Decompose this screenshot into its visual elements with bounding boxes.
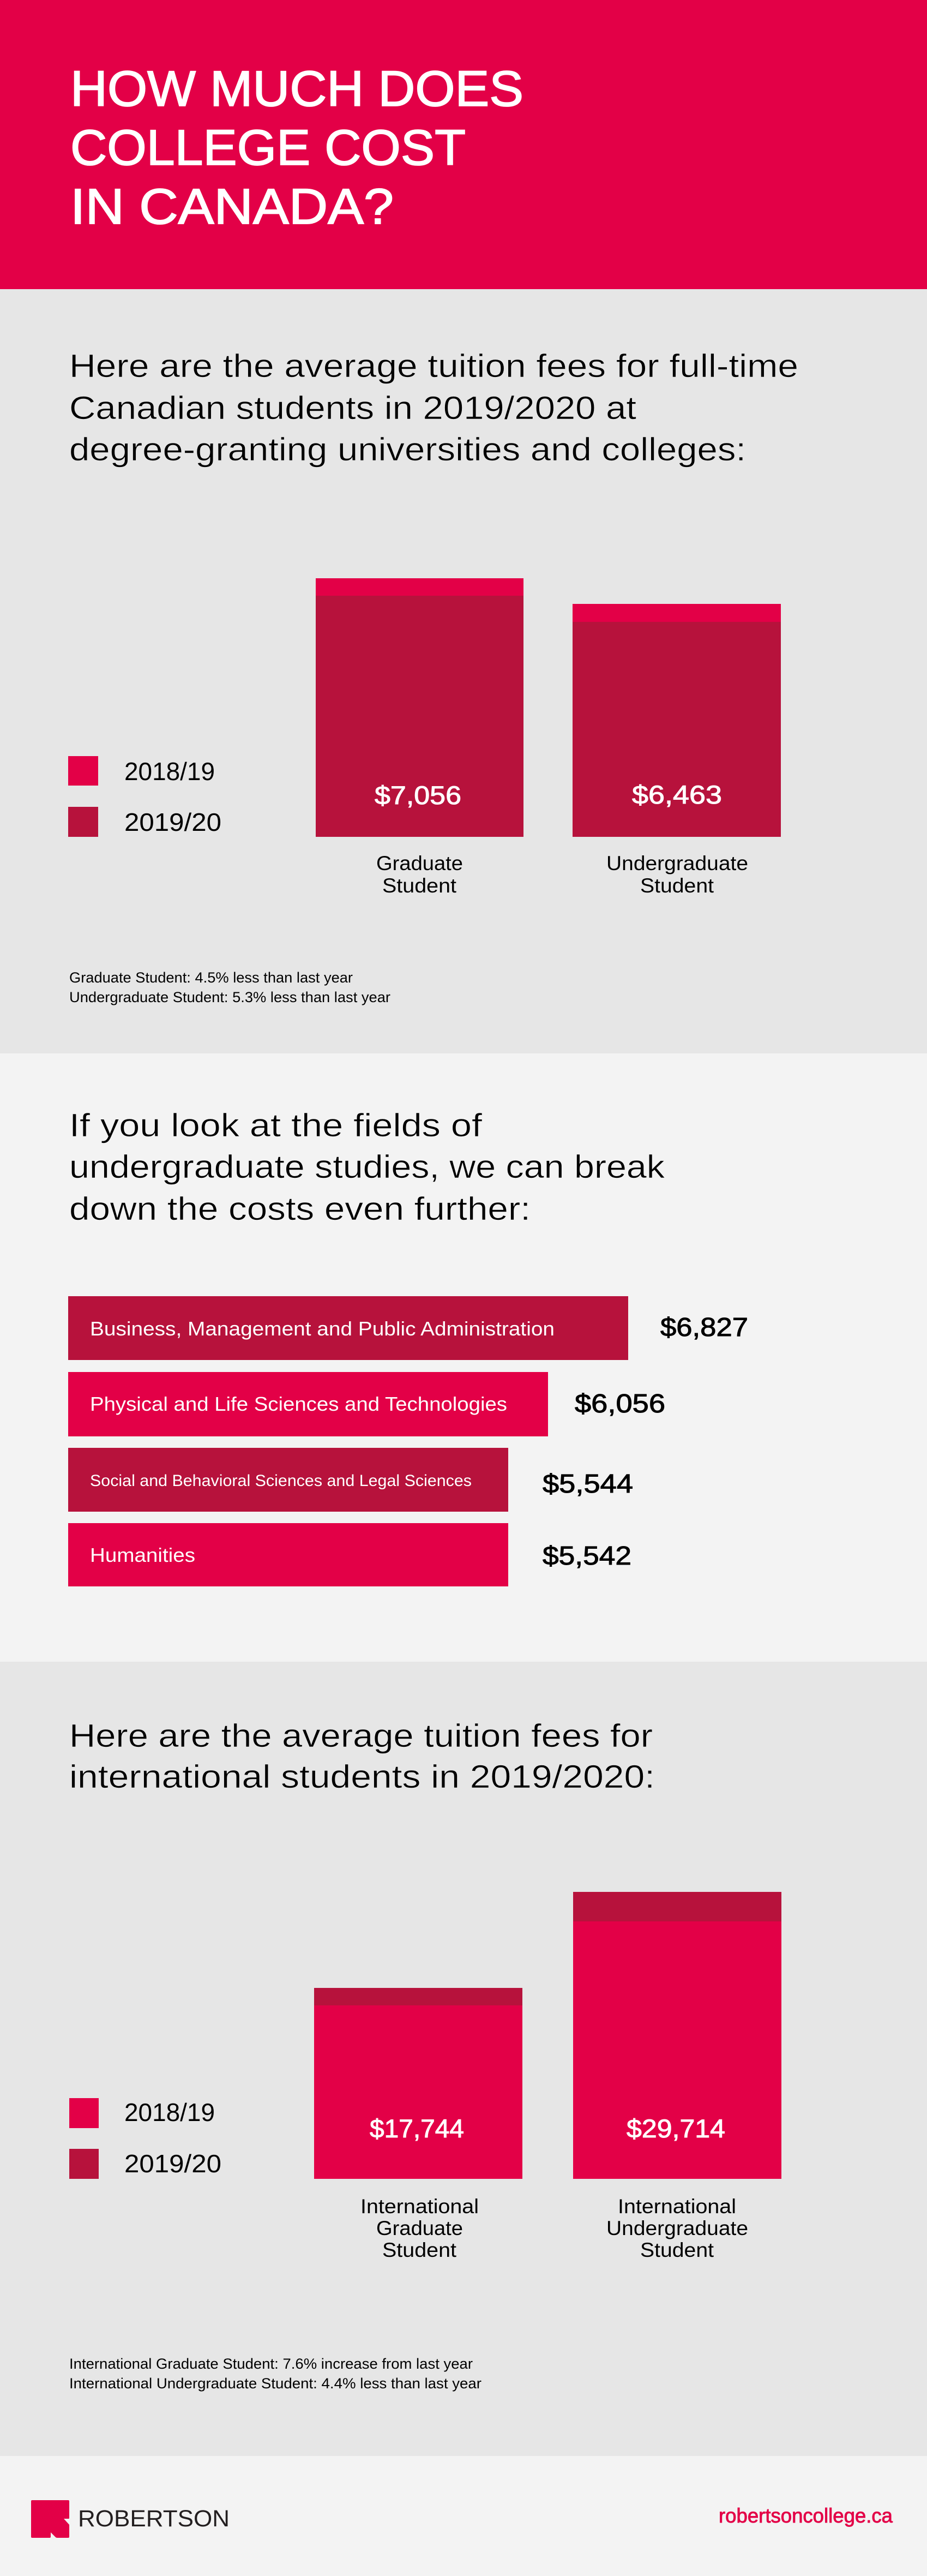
heading: fields of study: down the costs even further:	[69, 1191, 531, 1227]
title: HOW MUCH DOES	[70, 61, 523, 117]
icon: Robertson logo mark	[31, 2500, 69, 2538]
title	[70, 61, 523, 235]
bar: humanities: Humanities	[90, 1544, 195, 1566]
bar: humanities: $5,542	[543, 1542, 631, 1571]
label: graduate student: Student	[382, 874, 457, 897]
label: undergraduate student	[606, 852, 748, 897]
logo: ROBERTSON	[78, 2506, 230, 2532]
header panel	[0, 0, 927, 289]
label: undergraduate student: Student	[640, 874, 714, 897]
legend	[69, 2098, 221, 2179]
legend: 2019/20	[124, 808, 221, 836]
heading: fields of study: undergraduate studies, we can break	[69, 1149, 665, 1185]
legend: 2018/19	[124, 2098, 215, 2126]
bar: physical and life sciences	[68, 1372, 665, 1436]
title: IN CANADA?	[70, 179, 394, 235]
heading: Canadian tuition: Here are the average tuition fees for full-time	[69, 348, 798, 384]
bar: physical and life sciences: $6,056	[575, 1389, 665, 1418]
heading: Canadian tuition: Canadian students in 2019/2020 at	[69, 390, 636, 426]
bar: humanities	[68, 1523, 631, 1586]
legend	[68, 756, 221, 837]
bar: graduate student	[316, 578, 523, 837]
label: international undergraduate student: Student	[640, 2239, 714, 2261]
bar: graduate student: $7,056	[375, 781, 461, 810]
bar: international undergraduate student: $29,714	[627, 2114, 725, 2143]
bar: social and behavioral sciences: $5,544	[543, 1470, 633, 1499]
heading: international tuition: international students in 2019/2020:	[69, 1759, 655, 1795]
legend: 2018/19	[124, 757, 215, 786]
title: COLLEGE COST	[70, 120, 466, 176]
heading: international tuition	[69, 1718, 655, 1795]
panel: Canadian students tuition	[0, 289, 927, 1053]
heading: Canadian tuition	[69, 348, 798, 468]
legend: 2019/20	[124, 2149, 221, 2178]
bar: international graduate student	[314, 1988, 522, 2179]
label: international undergraduate student	[606, 2195, 748, 2261]
label: international undergraduate student: Undergraduate	[606, 2217, 748, 2239]
footnotes: Undergraduate Student: 5.3% less than last year	[69, 989, 390, 1005]
heading: international tuition: Here are the average tuition fees for	[69, 1718, 653, 1754]
bar: undergraduate student	[573, 604, 781, 837]
logo	[31, 2500, 230, 2538]
footnotes: International Graduate Student: 7.6% increase from last year	[69, 2356, 473, 2372]
bar: international undergraduate student	[573, 1892, 781, 2179]
footnotes	[69, 969, 390, 1005]
label: graduate student	[376, 852, 463, 897]
label: undergraduate student: Undergraduate	[606, 852, 748, 874]
bar: physical and life sciences: Physical and Life Sciences and Technologies	[90, 1393, 507, 1415]
website link: robertsoncollege.ca	[719, 2505, 893, 2527]
heading: Canadian tuition: degree-granting universities and colleges:	[69, 432, 746, 468]
bar: business	[68, 1296, 748, 1360]
heading: fields of study	[69, 1107, 665, 1227]
heading: fields of study: If you look at the fields of	[69, 1107, 483, 1143]
footnotes: International Undergraduate Student: 4.4% less than last year	[69, 2375, 481, 2392]
label: international graduate student	[360, 2195, 479, 2261]
bar: social and behavioral sciences	[68, 1448, 633, 1512]
label: international graduate student: International	[360, 2195, 479, 2218]
footnotes	[69, 2356, 481, 2392]
footnotes: Graduate Student: 4.5% less than last year	[69, 969, 353, 986]
label: international graduate student: Graduate	[376, 2217, 463, 2239]
bar: business: $6,827	[660, 1313, 748, 1342]
panel: fields of undergraduate study	[0, 1053, 927, 1662]
panel: international students tuition	[0, 1662, 927, 2456]
bar: social and behavioral sciences: Social and Behavioral Sciences and Legal Sciences	[90, 1472, 472, 1490]
bar: business: Business, Management and Public Administration	[90, 1317, 555, 1340]
label: international undergraduate student: International	[618, 2195, 736, 2218]
label: international graduate student: Student	[382, 2239, 457, 2261]
label: graduate student: Graduate	[376, 852, 463, 874]
footer panel	[0, 2456, 927, 2576]
bar: international graduate student: $17,744	[370, 2114, 464, 2143]
bar: undergraduate student: $6,463	[632, 780, 722, 809]
